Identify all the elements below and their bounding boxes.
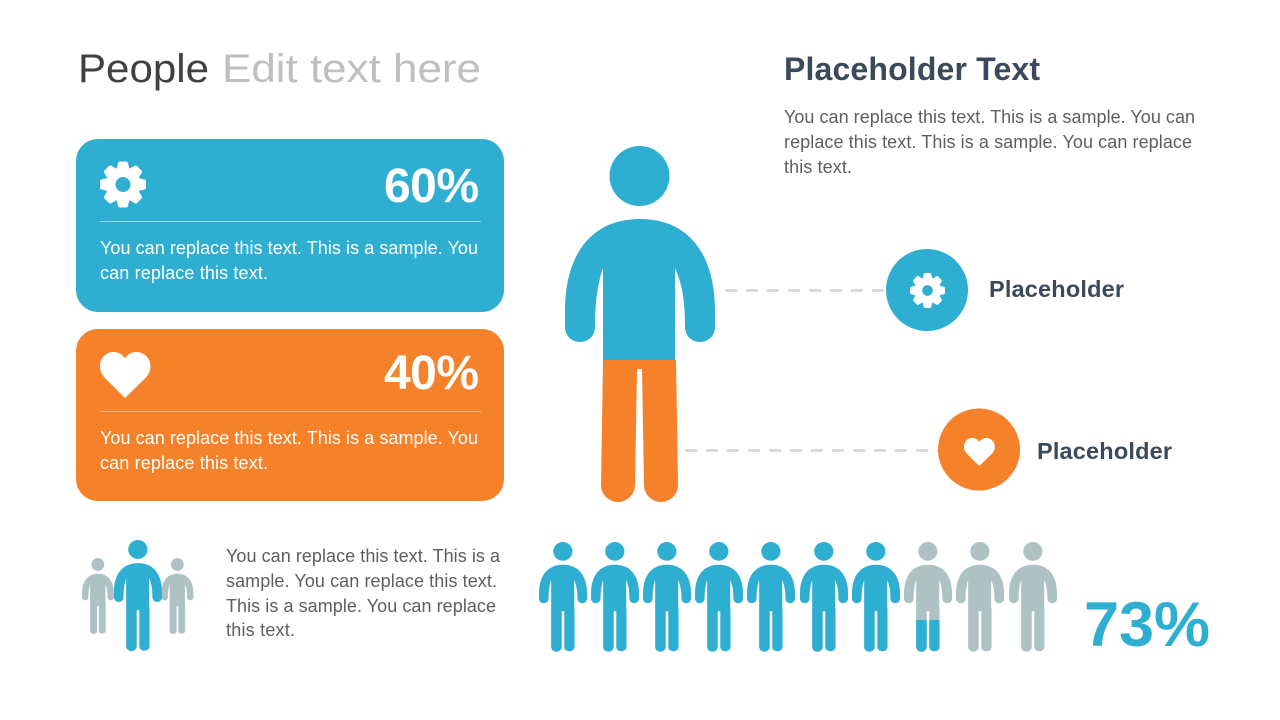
card text: blue [100,238,478,283]
stat: 40%: 40% [384,347,479,400]
card text: blue: You can replace this text. This is a sample. You [100,238,478,258]
text block: description [784,107,1195,177]
panel: blue 60% card [76,139,504,312]
callout: heart placeholder: Placeholder [1037,438,1172,464]
panel: orange 40% card [76,329,504,501]
text block: group description: sample. You can replace this text. [226,571,497,591]
connector: upper body to gear [725,289,886,292]
title: Edit text here [222,47,481,91]
text block: group description: This is a sample. You can replace [226,596,496,616]
card text: orange: can replace this text. [100,453,268,473]
heading: placeholder text: Placeholder Text [784,51,1040,87]
chart: row of ten people pictogram [539,542,1057,652]
card text: blue: can replace this text. [100,263,268,283]
title [78,47,481,91]
icon: gear [100,162,146,208]
title: People [78,47,209,91]
icon: large person [565,146,715,502]
text block: group description [226,546,501,640]
text block: description: You can replace this text. This is a sample. You can [784,107,1195,127]
text block: description: this text. [784,157,852,177]
callout: gear placeholder [886,249,1124,331]
card text: orange [100,428,478,473]
icon: heart [100,352,150,398]
text block: group description: this text. [226,620,295,640]
text block: group description: You can replace this text. This is a [226,546,501,566]
stat: 60%: 60% [384,160,479,213]
callout: gear placeholder: Placeholder [989,276,1124,302]
text block: description: replace this text. This is a sample. You can replace [784,132,1192,152]
icon: group of three people [82,540,193,651]
card text: orange: You can replace this text. This is a sample. You [100,428,478,448]
callout: heart placeholder [938,408,1172,490]
stat: 73%: 73% [1084,590,1210,660]
connector: legs to heart [685,449,938,452]
